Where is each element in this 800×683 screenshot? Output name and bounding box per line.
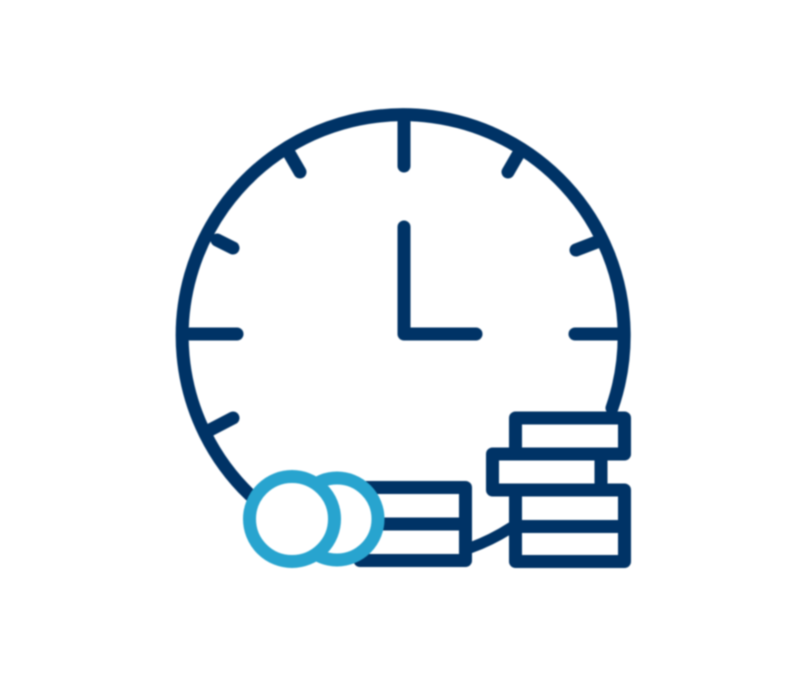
clock ticks (190, 122, 618, 431)
clock hands (404, 227, 476, 334)
coin stack: right (492, 418, 624, 562)
coin stack: middle (360, 488, 512, 560)
coins: light blue (250, 476, 378, 562)
clock face (182, 115, 624, 495)
